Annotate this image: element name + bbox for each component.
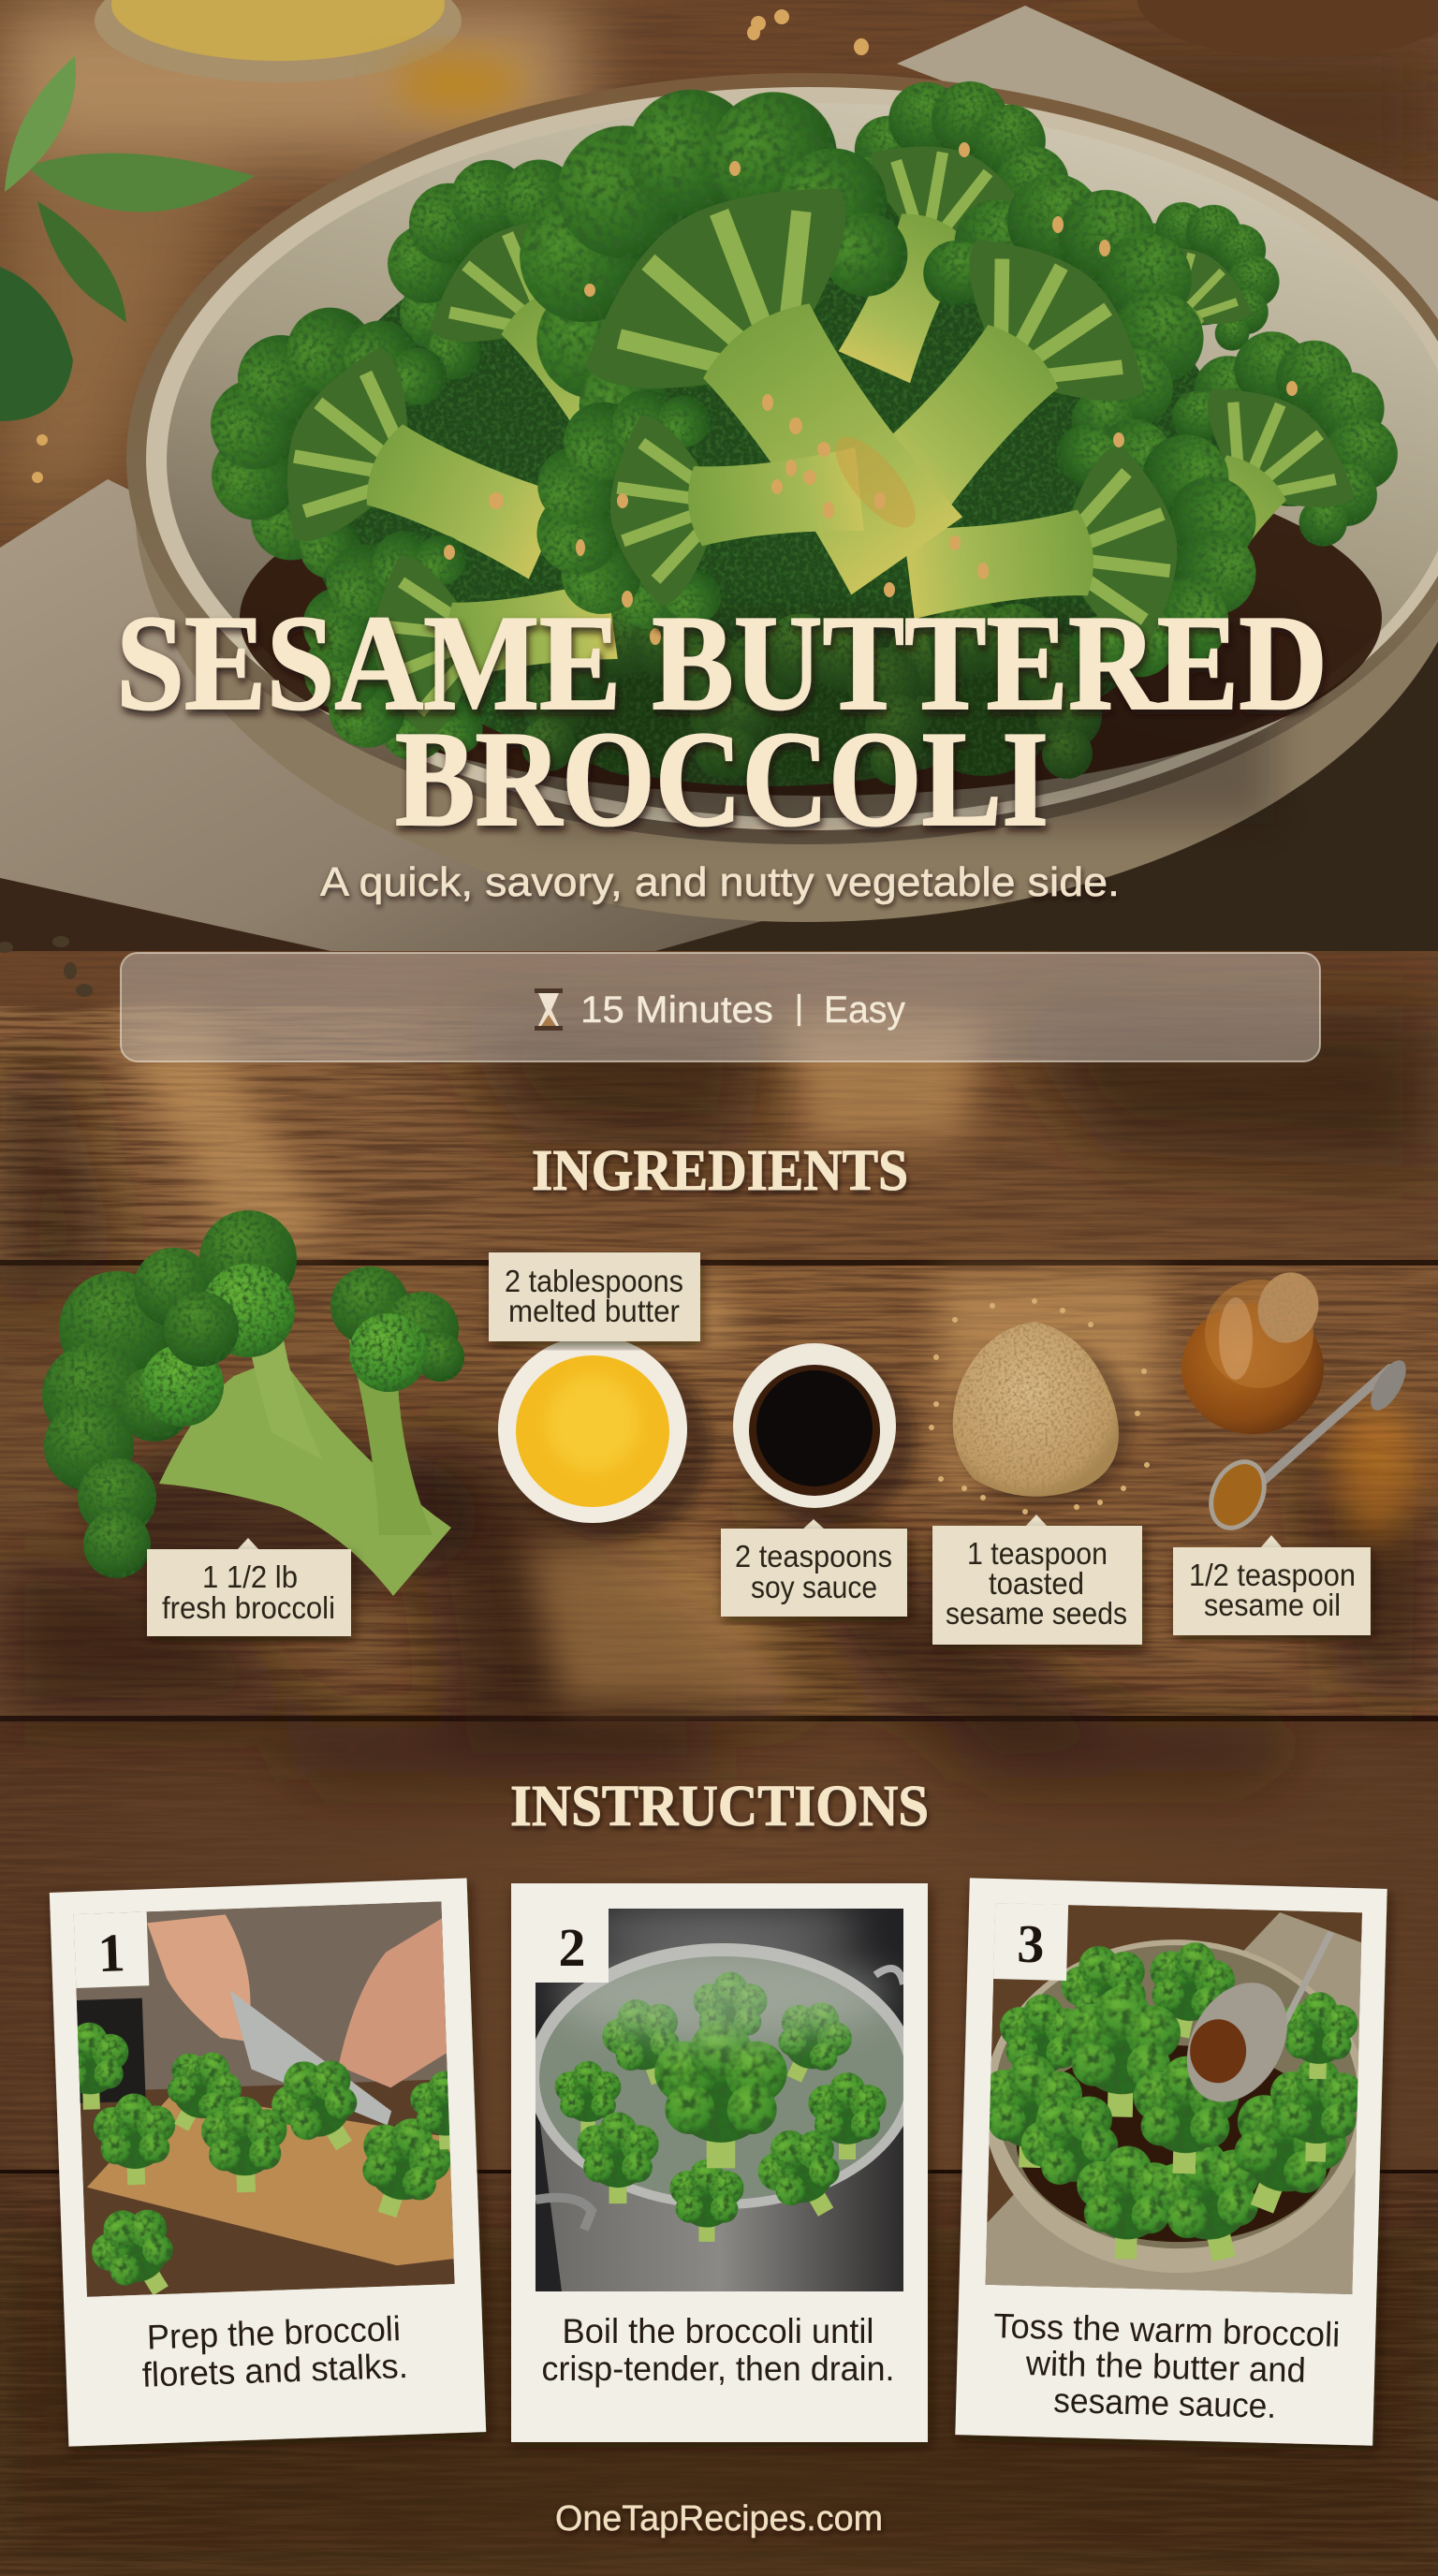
sesame seeds [32,9,1298,645]
label: soy sauce [721,1519,907,1617]
label: broccoli [147,1538,351,1636]
broccoli pile [169,12,1438,824]
icon: hourglass [535,988,563,1031]
step 1 caption [140,2309,408,2394]
label: broccoli: fresh broccoli [162,1590,335,1625]
label: butter: 2 tablespoons [505,1264,683,1298]
step 1 caption: florets and stalks. [141,2347,408,2394]
title [116,587,1328,855]
label: soy sauce: soy sauce [751,1570,877,1604]
heading: instructions: INSTRUCTIONS [510,1775,929,1838]
step 3 caption [991,2306,1341,2427]
hero photo: bowl of broccoli on a table [0,0,1438,997]
step 1 number tab: 1 [96,1922,126,1983]
title: BROCCOLI [395,703,1049,855]
step 3 photo: tossing in a bowl [976,1903,1374,2294]
step card 2 [511,1883,928,2442]
wooden bowl top right [1137,0,1438,58]
label: sesame oil: sesame oil [1204,1588,1341,1622]
bowl [126,73,1438,922]
label: sesame seeds: 1 teaspoon [967,1536,1108,1571]
footer website: OneTapRecipes.com [555,2499,883,2539]
step 2 caption: Boil the broccoli until [562,2312,874,2350]
leaves [0,56,255,421]
step 3 caption: sesame sauce. [1053,2381,1277,2425]
step 3 number tab: 3 [1017,1913,1045,1974]
step card 3 [955,1878,1387,2446]
time and difficulty bar [121,953,1320,1061]
oil glass at top [95,0,524,114]
label: broccoli: 1 1/2 lb [202,1559,298,1594]
label: sesame oil: 1/2 teaspoon [1189,1558,1356,1592]
heading: ingredients: INGREDIENTS [532,1139,908,1203]
title: SESAME BUTTERED [116,587,1328,739]
step 2 caption: crisp-tender, then drain. [541,2349,895,2388]
label: butter [489,1252,700,1341]
subtitle: A quick, savory, and nutty vegetable side. [320,859,1120,905]
label: sesame seeds: sesame seeds [946,1596,1127,1631]
label: sesame seeds [932,1515,1142,1645]
step card 1 [45,1878,492,2447]
ingredient: sesame seeds pile [929,1298,1150,1515]
step 2 caption [541,2312,895,2388]
napkin top right [897,6,1438,337]
step 3 number tab [993,1903,1068,1981]
ingredient: melted butter bowl [498,1336,712,1540]
ingredient: soy sauce bowl [733,1343,916,1524]
step 2 number tab [536,1909,609,1983]
time and difficulty text [580,989,905,1031]
time and difficulty text: Easy [824,989,905,1031]
table light and shadow [0,0,1438,524]
step 3 caption: with the butter and [1024,2344,1306,2390]
label: butter: melted butter [508,1294,680,1328]
step 1 number tab [74,1911,149,1988]
time and difficulty text: 15 Minutes [580,989,773,1031]
step 2 photo: boiling pot [528,1900,917,2291]
label: soy sauce: 2 teaspoons [735,1539,892,1573]
cloth under bowl [0,479,1438,951]
scattered seeds lower left [0,936,93,997]
step 1 photo: cutting broccoli [73,1901,455,2297]
step 2 number tab: 2 [558,1917,586,1978]
label: sesame seeds: toasted [989,1566,1084,1601]
step 3 caption: Toss the warm broccoli [993,2306,1341,2354]
label: sesame oil [1173,1535,1371,1635]
ingredient: whole broccoli [42,1210,477,1601]
step 1 caption: Prep the broccoli [146,2309,402,2357]
ingredient: sesame oil bottle and spoon [1181,1266,1413,1537]
